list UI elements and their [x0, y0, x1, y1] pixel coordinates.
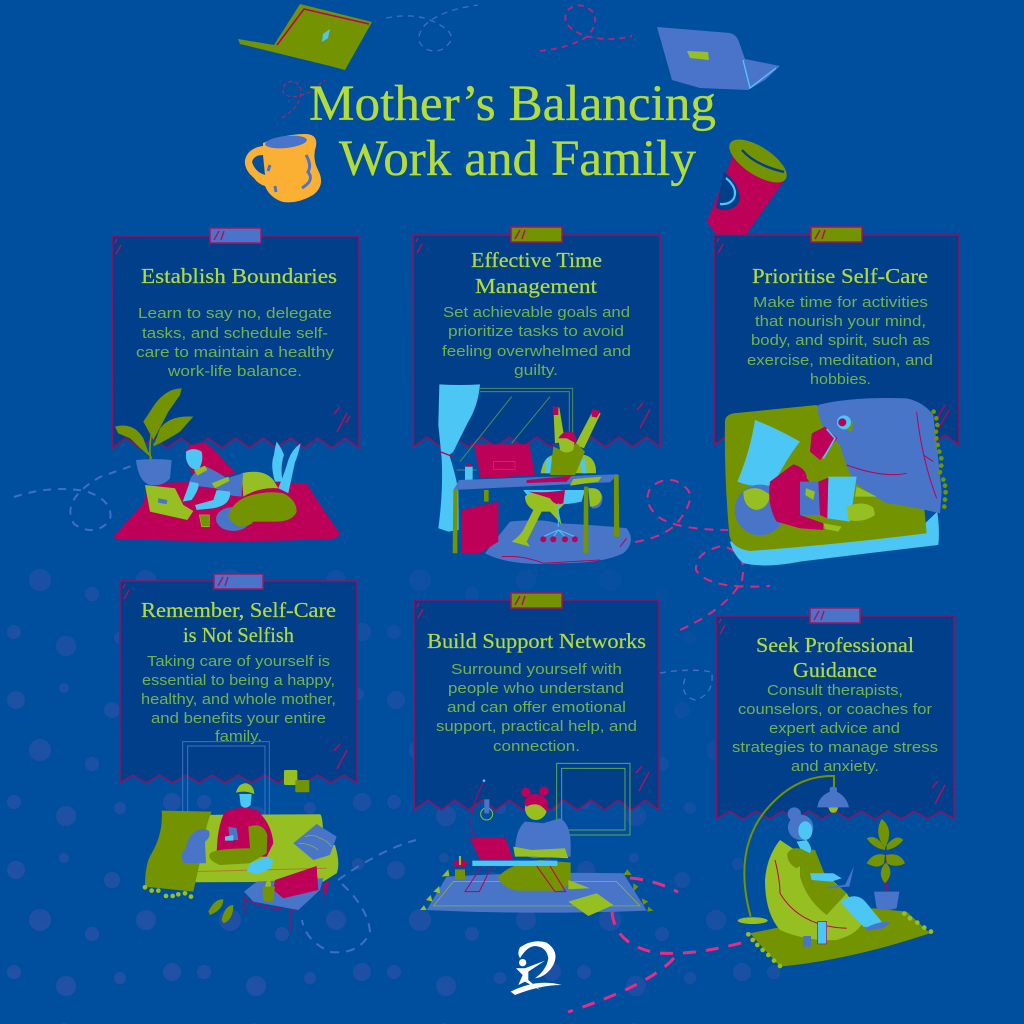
heading: is Not Selfish: [183, 623, 294, 647]
panel: build support networks: [414, 593, 659, 810]
heading: Seek Professional: [756, 633, 914, 657]
illustration: person on couch with dog: [143, 742, 338, 932]
body text: [747, 294, 933, 388]
body text: hobbies.: [810, 371, 871, 388]
body text: Set achievable goals and: [443, 304, 630, 321]
panel: establish boundaries: [112, 228, 359, 448]
illustration: woman with laptop on floor mat: [420, 763, 653, 916]
title: [309, 76, 716, 187]
dashed path: middle magenta loops: [635, 480, 728, 542]
body text: counselors, or coaches for: [738, 701, 932, 718]
body text: Make time for activities: [753, 294, 928, 311]
body text: and anxiety.: [791, 758, 879, 775]
body text: Consult therapists,: [767, 682, 903, 699]
body text: that nourish your mind,: [755, 313, 926, 330]
body text: healthy, and whole mother,: [141, 691, 336, 708]
heading: Establish Boundaries: [141, 264, 337, 288]
body text: strategies to manage stress: [732, 739, 938, 756]
title: Work and Family: [339, 131, 696, 187]
body text: people who understand: [448, 680, 624, 697]
body text: expert advice and: [769, 720, 900, 737]
dashed path: right periwinkle: [660, 670, 712, 700]
body text: Surround yourself with: [451, 661, 622, 678]
body text: prioritize tasks to avoid: [448, 323, 624, 340]
heading: Build Support Networks: [427, 629, 646, 653]
body text: Learn to say no, delegate: [138, 305, 332, 322]
body text: [732, 682, 938, 775]
body text: [136, 305, 335, 380]
dashed path: title magenta: [282, 80, 325, 118]
body text: body, and spirit, such as: [751, 332, 930, 349]
panel: effective time management: [413, 227, 660, 447]
heading: [471, 248, 602, 298]
icon: orange mug: [245, 134, 321, 202]
illustration: woman at desk with computer: [438, 384, 631, 564]
dashed path: bottom magenta: [568, 878, 758, 1012]
body text: essential to being a happy,: [142, 672, 335, 689]
body text: [442, 304, 631, 379]
body text: guilty.: [514, 362, 558, 379]
illustration: woman lying in bed with book: [725, 398, 949, 565]
dashed path: lower-left periwinkle: [302, 840, 416, 952]
body text: Taking care of yourself is: [147, 653, 330, 670]
body text: support, practical help, and: [436, 718, 637, 735]
icon: green laptop: [238, 4, 372, 70]
body text: [141, 653, 336, 745]
heading: [756, 633, 914, 682]
body text: and can offer emotional: [447, 699, 626, 716]
logo: [511, 941, 562, 995]
body text: tasks, and schedule self-: [142, 325, 328, 342]
icon: blue laptop: [657, 27, 780, 90]
body text: family.: [215, 728, 262, 745]
body text: feeling overwhelmed and: [442, 343, 631, 360]
dashed path: top magenta: [540, 5, 632, 51]
body text: connection.: [493, 738, 580, 755]
heading: Effective Time: [471, 248, 602, 272]
icon: takeaway cup: [707, 131, 793, 236]
heading: Remember, Self-Care: [141, 598, 336, 622]
dashed path: left periwinkle: [14, 463, 140, 530]
background dot pattern: [0, 560, 780, 1024]
heading: [141, 598, 336, 647]
heading: Prioritise Self-Care: [752, 264, 928, 288]
body text: work-life balance.: [167, 363, 302, 380]
body text: care to maintain a healthy: [136, 344, 335, 361]
body text: and benefits your entire: [151, 710, 326, 727]
illustration: woman in beanbag with laptop and lamp: [738, 776, 933, 968]
body text: [436, 661, 637, 755]
body text: exercise, meditation, and: [747, 352, 933, 369]
illustration: woman on rug with laptop and dog: [113, 388, 340, 541]
panel: remember self-care: [120, 574, 357, 783]
panel: prioritise self-care: [714, 227, 959, 445]
dashed path: lower-middle magenta: [680, 546, 770, 630]
panel: seek professional guidance: [716, 608, 954, 819]
title: Mother’s Balancing: [309, 76, 716, 132]
dashed path: top periwinkle: [386, 5, 478, 51]
heading: Management: [475, 274, 597, 298]
heading: Guidance: [793, 658, 877, 682]
